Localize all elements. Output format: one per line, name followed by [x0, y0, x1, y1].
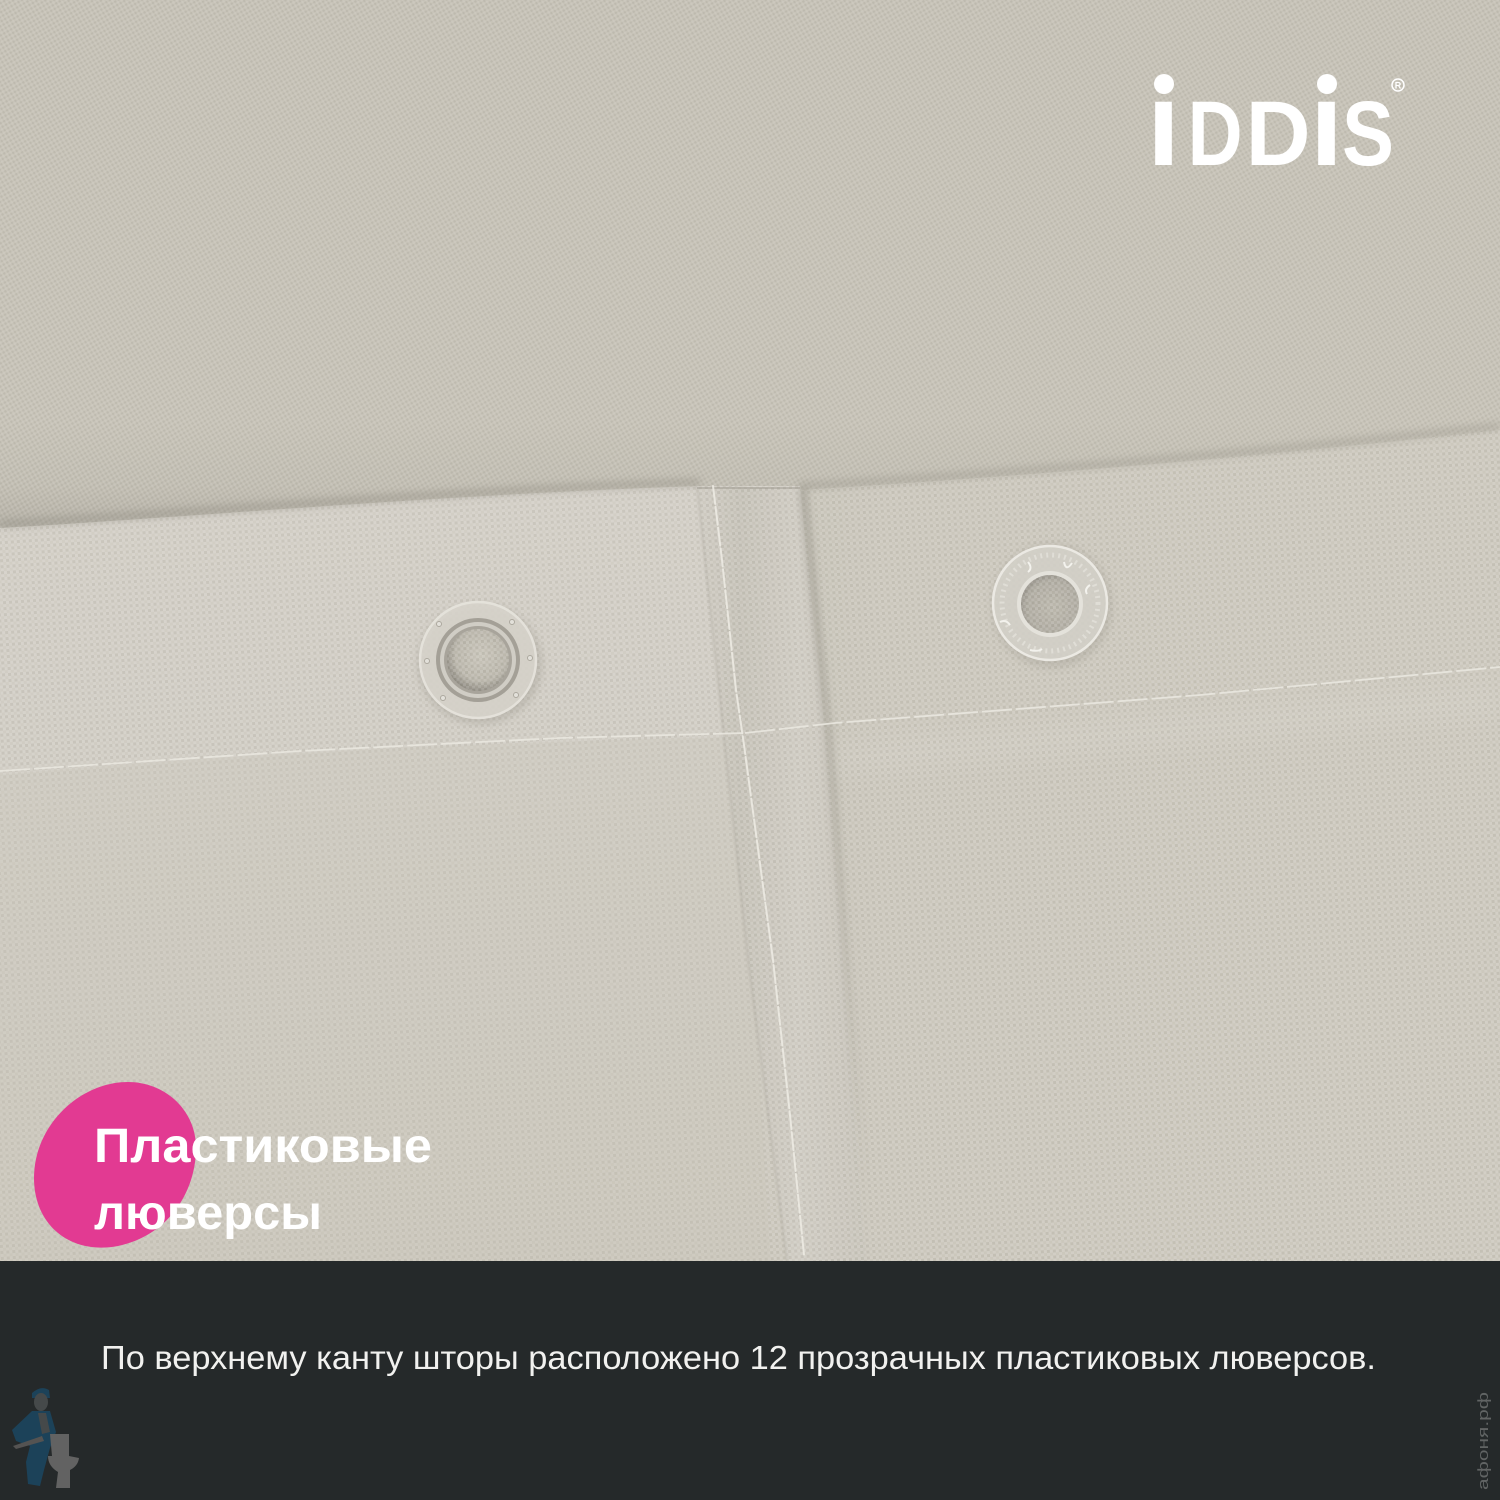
icon: plumber with toilet watermark	[12, 1388, 79, 1488]
vertical stitch line	[713, 486, 804, 1255]
panel: right curtain hem fabric	[800, 426, 1500, 1261]
heading: product feature	[94, 1120, 432, 1240]
body text: По верхнему канту шторы расположено 12 прозрачных пластиковых люверсов.	[101, 1339, 1376, 1376]
logo: IDDIS: I	[1310, 83, 1342, 185]
heading: product feature: Пластиковые	[94, 1120, 432, 1173]
logo: IDDIS: I	[1148, 83, 1180, 185]
heading: product feature: люверсы	[94, 1187, 322, 1240]
logo: IDDIS: R	[1395, 80, 1402, 90]
logo: IDDIS: D	[1246, 83, 1311, 185]
panel: upper curtain fabric	[0, 0, 1500, 540]
icon: right transparent plastic grommet	[992, 544, 1112, 668]
panel: dark footer band	[0, 1261, 1500, 1500]
horizontal stitch line left	[0, 733, 745, 771]
logo: IDDIS	[1148, 74, 1404, 185]
icon: left plastic grommet with metal ring	[418, 601, 542, 724]
panel: vertical folded side hem	[697, 486, 866, 1261]
panel: left curtain hem fabric	[0, 482, 880, 1261]
logo: IDDIS: D	[1188, 83, 1243, 185]
logo: IDDIS: S	[1342, 83, 1394, 185]
decorative pink blob	[34, 1082, 196, 1248]
watermark: vertical site name: афоня.рф	[1475, 1392, 1492, 1490]
horizontal stitch line right	[745, 667, 1500, 733]
